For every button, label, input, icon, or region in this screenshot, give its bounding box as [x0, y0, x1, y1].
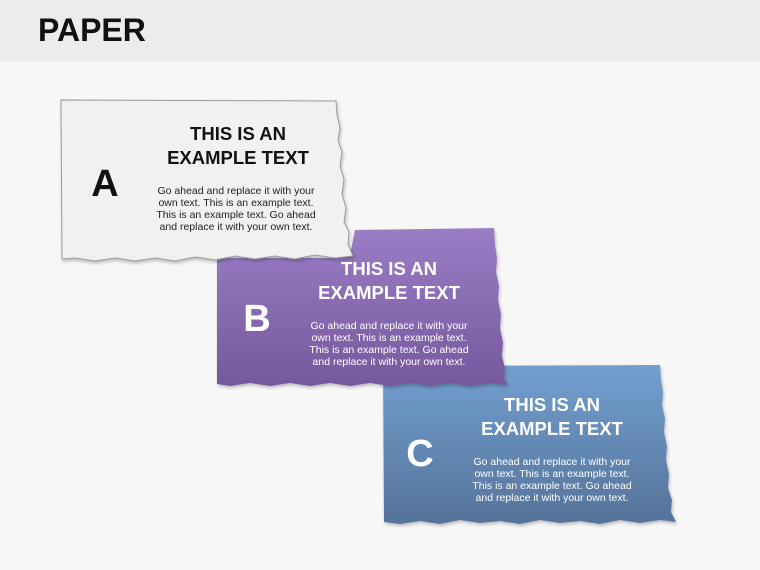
- title: PAPER: [38, 12, 146, 48]
- header: [0, 0, 760, 62]
- panel: B: [217, 228, 508, 386]
- label A: A: [91, 163, 119, 205]
- body C: own text. This is an example text.: [474, 468, 630, 480]
- body A: Go ahead and replace it with your: [157, 185, 315, 197]
- body B: Go ahead and replace it with your: [310, 320, 468, 332]
- body A: own text. This is an example text.: [158, 197, 314, 209]
- heading A: EXAMPLE TEXT: [167, 147, 310, 168]
- heading C: EXAMPLE TEXT: [481, 418, 624, 439]
- label C: C: [406, 433, 434, 475]
- heading B: EXAMPLE TEXT: [318, 282, 461, 303]
- body C: Go ahead and replace it with your: [473, 456, 631, 468]
- body B: This is an example text. Go ahead: [309, 344, 469, 356]
- body B: own text. This is an example text.: [311, 332, 467, 344]
- label B: B: [243, 298, 271, 340]
- body A: and replace it with your own text.: [160, 221, 312, 233]
- heading C: THIS IS AN: [504, 394, 600, 415]
- body A: This is an example text. Go ahead: [156, 209, 316, 221]
- panel: C: [383, 365, 676, 524]
- panel: A: [61, 100, 353, 261]
- heading A: THIS IS AN: [190, 123, 286, 144]
- body B: and replace it with your own text.: [313, 356, 465, 368]
- heading B: THIS IS AN: [341, 258, 437, 279]
- body C: and replace it with your own text.: [476, 492, 628, 504]
- body C: This is an example text. Go ahead: [472, 480, 632, 492]
